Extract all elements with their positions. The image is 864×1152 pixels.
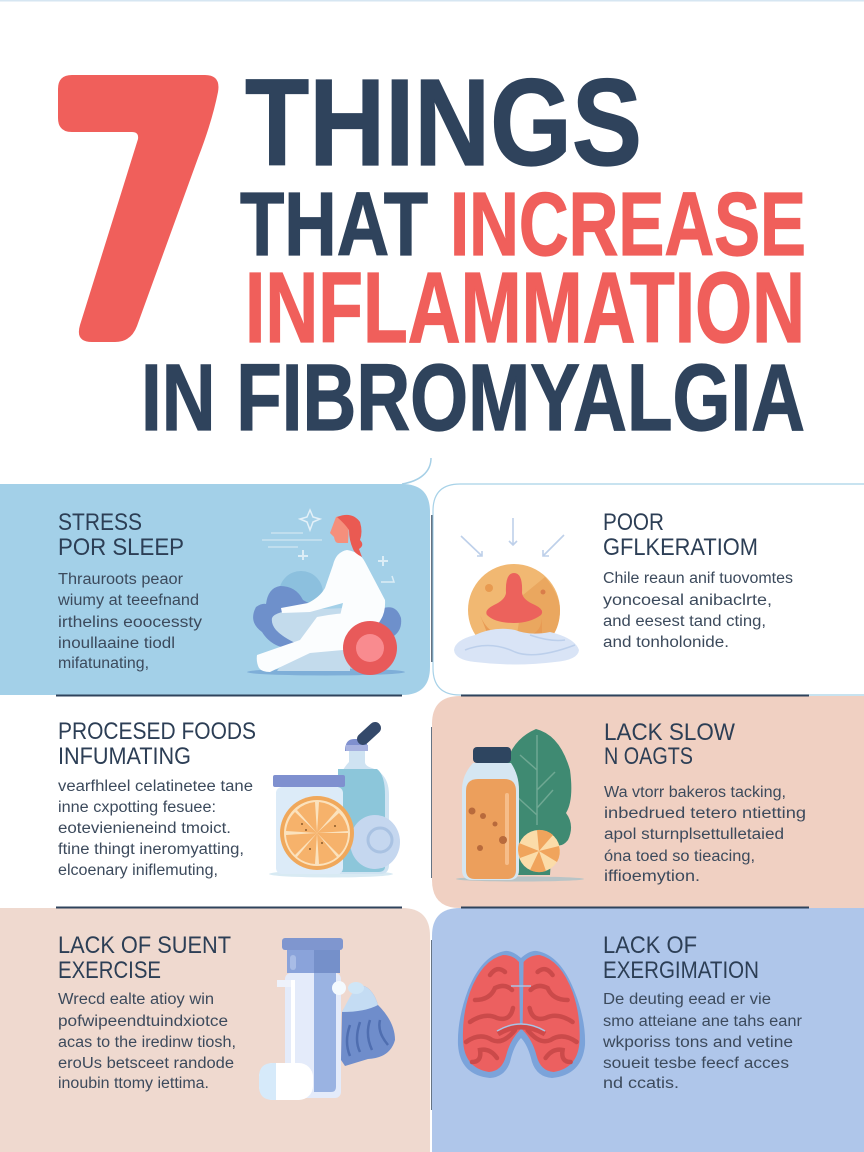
body text: vearfhleel celatinetee tane <box>58 778 253 795</box>
heading: LACK OF <box>603 932 697 959</box>
heading <box>603 932 759 984</box>
big numeral 7 <box>58 75 218 342</box>
body text: inbedrued tetero ntietting <box>604 805 806 822</box>
body text: ftine thingt ineromyatting, <box>58 841 244 858</box>
icon: inflamed globe with arrows <box>454 518 579 664</box>
heading <box>58 509 184 561</box>
icon: red lungs <box>458 951 585 1078</box>
body text: soueit tesbe feecf acces <box>603 1055 789 1072</box>
body text: nd ccatis. <box>603 1075 679 1092</box>
body text: inoullaaine tiodl <box>58 635 175 652</box>
heading <box>58 718 256 770</box>
panel: stress and poor sleep <box>0 484 430 695</box>
body text <box>603 570 793 651</box>
panel: lack of slow nutrients <box>432 696 864 908</box>
panel: lack of exergimation <box>432 908 864 1152</box>
heading: EXERCISE <box>58 957 161 984</box>
body text: Thrauroots peaor <box>58 571 183 588</box>
icon: jar, bottle and orange slice <box>269 728 400 878</box>
heading <box>604 719 735 770</box>
left lobe <box>463 955 520 1072</box>
panel: processed foods <box>0 696 430 908</box>
heading: PROCESED FOODS <box>58 718 256 745</box>
body text: iffioemytion. <box>604 868 700 885</box>
body text: Chile reaun anif tuovomtes <box>603 570 793 587</box>
body text: apol sturnplsettulletaied <box>604 826 784 843</box>
body text: eotevienieneind tmoict. <box>58 820 231 837</box>
body text: yoncoesal anibaclrte, <box>603 592 772 609</box>
body text: acas to the iredinw tiosh, <box>58 1034 236 1051</box>
panel: poor circulation <box>433 484 864 695</box>
heading: LACK OF SUENT <box>58 932 231 959</box>
icon: seated woman with red ball <box>247 510 405 676</box>
body text: wiumy at teeefnand <box>57 592 199 609</box>
heading: LACK SLOW <box>604 719 735 746</box>
icon: juice bottle, leaf and orange <box>456 729 584 882</box>
heading: INFUMATING <box>58 743 191 770</box>
heading: GFLKERATIOM <box>603 534 758 561</box>
body text: mifatunating, <box>58 655 149 672</box>
icon: exercise bottle and shell <box>259 938 395 1100</box>
body text: elcoenary iniflemuting, <box>58 862 218 879</box>
heading <box>603 509 758 561</box>
panel: lack of exercise <box>0 908 430 1152</box>
body text <box>58 778 253 879</box>
title line: THAT INCREASE <box>240 175 806 275</box>
heading: N OAGTS <box>604 743 693 770</box>
body text: óna toed so tieacing, <box>604 848 755 865</box>
title <box>141 55 806 451</box>
body text: and tonholonide. <box>603 634 729 651</box>
body text <box>602 991 802 1092</box>
body text: and eesest tand cting, <box>603 613 766 630</box>
heading: STRESS <box>58 509 142 536</box>
title line: THINGS: THINGS <box>245 55 642 192</box>
body text: inne cxpotting fesuee: <box>58 799 216 816</box>
heading: EXERGIMATION <box>603 957 759 984</box>
heading: POR SLEEP <box>58 534 184 561</box>
heading <box>58 932 231 984</box>
right lobe <box>523 955 580 1072</box>
body text: eroUs betsceet randode <box>58 1055 234 1072</box>
body text: wkporiss tons and vetine <box>602 1034 793 1051</box>
body text: Wa vtorr bakeros tacking, <box>604 784 786 801</box>
body text: De deuting eead er vie <box>603 991 771 1008</box>
body text: Wrecd ealte atioy win <box>58 991 214 1008</box>
body text: irthelins eoocessty <box>58 614 202 631</box>
body text: smo atteiane ane tahs eanr <box>603 1013 802 1030</box>
heading: POOR <box>603 509 664 536</box>
title line: THAT INCREASE: THAT <box>240 175 428 275</box>
body text: inoubin ttomy iettima. <box>58 1075 209 1092</box>
body text <box>57 571 202 672</box>
body text <box>58 991 236 1092</box>
body text: pofwipeendtuindxiotce <box>58 1013 228 1030</box>
body text <box>604 784 806 885</box>
